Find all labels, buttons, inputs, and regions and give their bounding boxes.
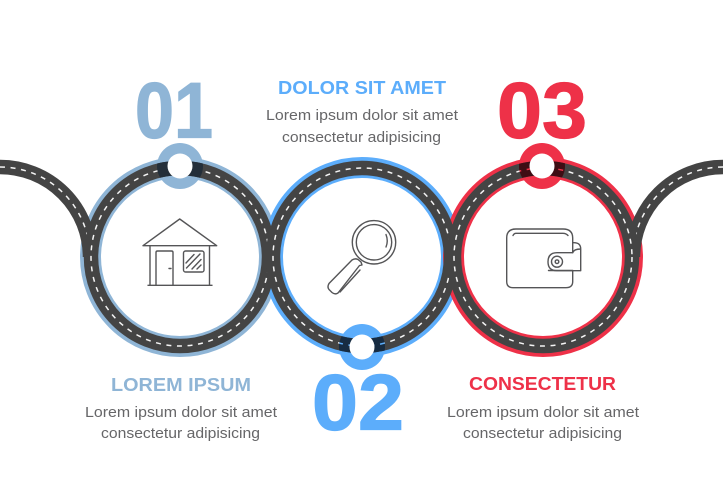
node disc: step 2: [339, 324, 385, 370]
number: 01: 01: [135, 66, 213, 154]
node: step 1: [157, 154, 203, 178]
ring: step 2: [272, 168, 452, 346]
road: circle 1: [91, 168, 269, 346]
number: 02: 02: [312, 358, 404, 446]
infographic canvas: [0, 81, 723, 441]
icon: house: [143, 219, 217, 285]
icon: wallet: [507, 229, 581, 288]
number: 03: 03: [497, 66, 587, 154]
heading: consectetur: CONSECTETUR: [469, 374, 616, 394]
text block: step 3 description: [447, 404, 640, 442]
ring: step 3: [454, 168, 632, 346]
text block: step 3 description: Lorem ipsum dolor sit amet: [447, 404, 640, 421]
icon: magnifying glass: [328, 221, 396, 294]
text block: step 3 description: consectetur adipisicing: [463, 425, 622, 442]
heading: dolor sit amet: DOLOR SIT AMET: [278, 78, 446, 98]
node disc: step 3: [519, 143, 565, 189]
text block: step 2 description: consectetur adipisicing: [282, 129, 441, 146]
road: circle 2: [273, 168, 451, 346]
road: left connector: [0, 167, 90, 257]
text block: step 1 description: consectetur adipisicing: [101, 425, 260, 442]
text block: step 1 description: [85, 404, 278, 442]
heading: lorem ipsum: LOREM IPSUM: [111, 375, 251, 395]
road: circle 3: [454, 168, 632, 346]
node: step 3: [519, 154, 565, 178]
text block: step 2 description: Lorem ipsum dolor sit amet: [266, 107, 459, 124]
text block: step 2 description: [266, 107, 459, 146]
road: right connector: [633, 167, 723, 257]
text block: step 1 description: Lorem ipsum dolor sit amet: [85, 404, 278, 421]
ring: step 1: [90, 168, 270, 346]
node disc: step 1: [157, 143, 203, 189]
node: step 2: [339, 334, 385, 360]
